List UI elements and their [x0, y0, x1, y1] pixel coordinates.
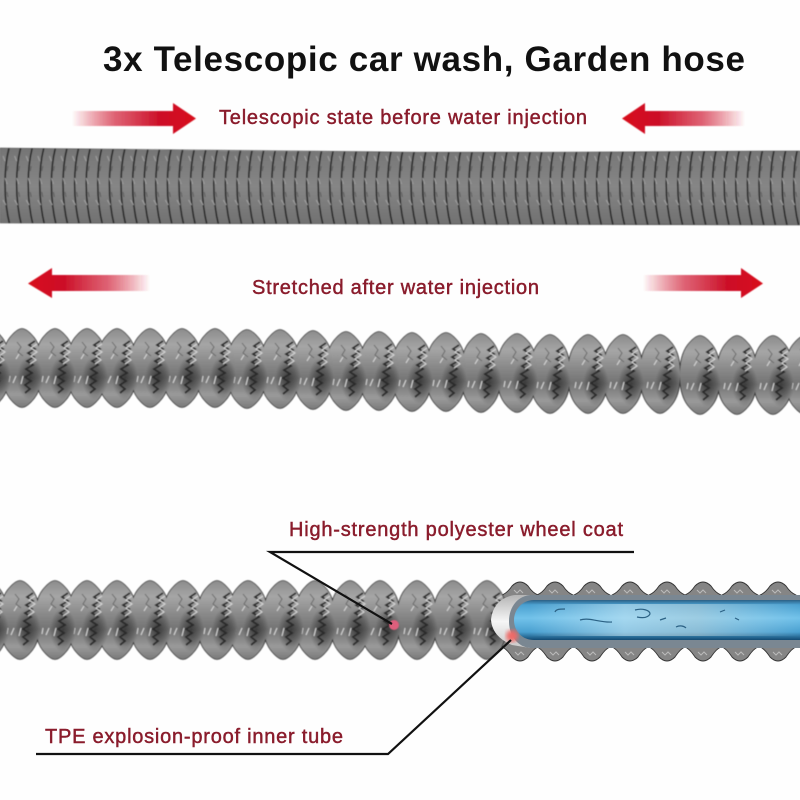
label: polyester coat: High-strength polyester wheel coat	[289, 519, 623, 541]
water highlight	[530, 604, 800, 636]
marker: polyester coat	[389, 620, 399, 630]
hose: contracted	[0, 148, 800, 225]
marker: inner tube	[506, 630, 518, 642]
leader line: inner tube	[36, 640, 511, 754]
label: stretched: Stretched after water injection	[252, 277, 539, 299]
label: inner tube: TPE explosion-proof inner tube	[45, 726, 343, 748]
bubbles	[555, 609, 739, 628]
arrow: inward from left	[72, 103, 196, 134]
white cut end	[491, 595, 530, 648]
arrow: outward to left	[28, 268, 150, 298]
arrow: inward from right	[622, 103, 745, 134]
inner tube wall	[509, 595, 800, 648]
inner tube water	[514, 600, 800, 640]
leader line: polyester coat	[270, 552, 634, 624]
ribs around inner tube	[502, 582, 796, 661]
title: 3x Telescopic car wash, Garden hose	[103, 40, 745, 79]
arrow: outward to right	[643, 268, 763, 298]
label: telescopic state: Telescopic state before water injection	[219, 107, 587, 129]
woven outer coat	[0, 581, 508, 659]
hose: stretched	[0, 329, 800, 414]
hose: cutaway	[0, 581, 800, 661]
